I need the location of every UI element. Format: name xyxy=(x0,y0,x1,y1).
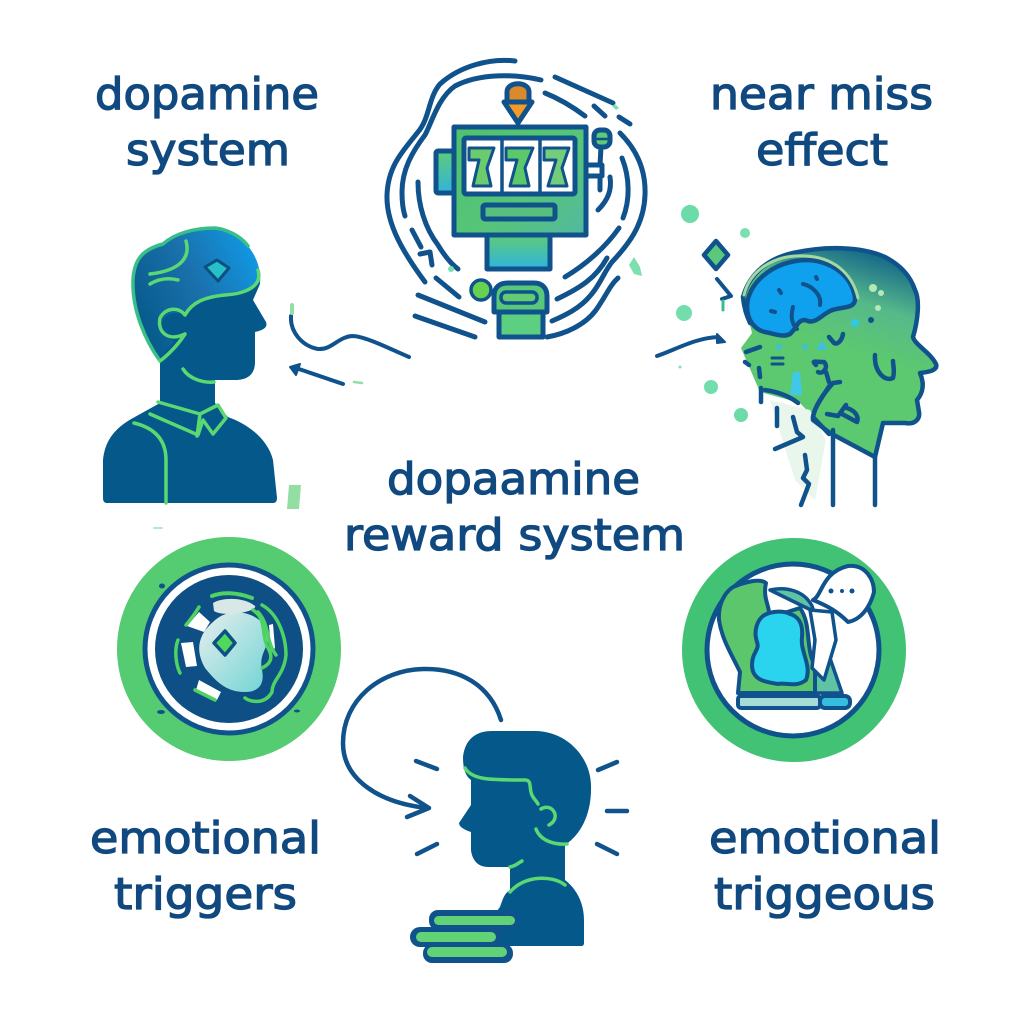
lever xyxy=(586,130,610,190)
green contour lines xyxy=(465,768,567,892)
heading: dopamine system: dopamine xyxy=(95,69,319,120)
brain folds xyxy=(771,277,820,329)
brain xyxy=(747,260,855,336)
heading: dopamine system xyxy=(95,69,319,176)
icon: right circle with figure and speech bubble xyxy=(682,538,906,762)
brain gem xyxy=(205,260,229,281)
chip green diamond xyxy=(214,631,235,655)
heading: emotional triggers: triggers xyxy=(114,869,297,920)
green contour lines xyxy=(133,228,259,503)
icon: left person profile with brain xyxy=(103,228,277,503)
dark chip body xyxy=(155,575,303,723)
blue figure xyxy=(752,612,808,684)
stacked green bars xyxy=(410,910,519,963)
icon: left circle with casino chip xyxy=(117,537,341,761)
silhouette xyxy=(103,228,277,503)
machine cabinet xyxy=(454,127,586,235)
face silhouette xyxy=(741,248,936,457)
loop arrow xyxy=(343,669,501,817)
icon: slot machine with swirling lines xyxy=(387,60,645,337)
coin slot bar xyxy=(483,205,555,219)
arrows from machine to left person xyxy=(154,305,409,528)
chip centre xyxy=(199,612,269,692)
face marks xyxy=(745,334,894,505)
heading: emotional triggers xyxy=(90,813,321,920)
heading: emotional triggers: emotional xyxy=(90,813,321,864)
head silhouette xyxy=(459,731,591,946)
heading: dopaamine reward system: dopaamine xyxy=(387,454,640,505)
heading: near miss effect: effect xyxy=(756,125,888,176)
reel window with 777 xyxy=(464,138,575,194)
head outline xyxy=(743,248,936,505)
swirling motion lines xyxy=(387,60,645,337)
green figure xyxy=(719,581,815,693)
orange pin xyxy=(504,84,532,123)
machine base xyxy=(487,235,550,269)
arrow into head xyxy=(657,334,725,356)
speech bubble xyxy=(813,566,874,622)
small dots xyxy=(157,584,300,714)
scattered dots and diamond xyxy=(676,205,884,422)
green button xyxy=(471,280,491,300)
heading: emotional triggeous: triggeous xyxy=(714,869,935,920)
heading: emotional triggeous: emotional xyxy=(709,813,941,864)
heading: near miss effect xyxy=(710,69,933,176)
torn white shape xyxy=(810,610,836,680)
chip segments xyxy=(181,612,275,700)
heading: emotional triggeous xyxy=(709,813,941,920)
heading: dopaamine reward system: reward system xyxy=(344,510,685,561)
heading: near miss effect: near miss xyxy=(710,69,933,120)
back panel xyxy=(770,589,842,693)
icon: bottom head with loop arrow and stacked bars xyxy=(343,669,627,963)
base bar xyxy=(738,696,850,708)
green swirl lines xyxy=(176,593,286,701)
green flecks xyxy=(448,104,642,276)
icon: right head with blue brain xyxy=(657,205,936,505)
pale mist under jaw xyxy=(770,400,826,500)
motion ticks xyxy=(416,761,627,854)
hair brain area xyxy=(133,228,260,358)
lower tray xyxy=(494,283,547,337)
heading: dopaamine reward system xyxy=(344,454,685,561)
heading: dopamine system: system xyxy=(126,125,290,176)
side tab xyxy=(436,151,454,193)
